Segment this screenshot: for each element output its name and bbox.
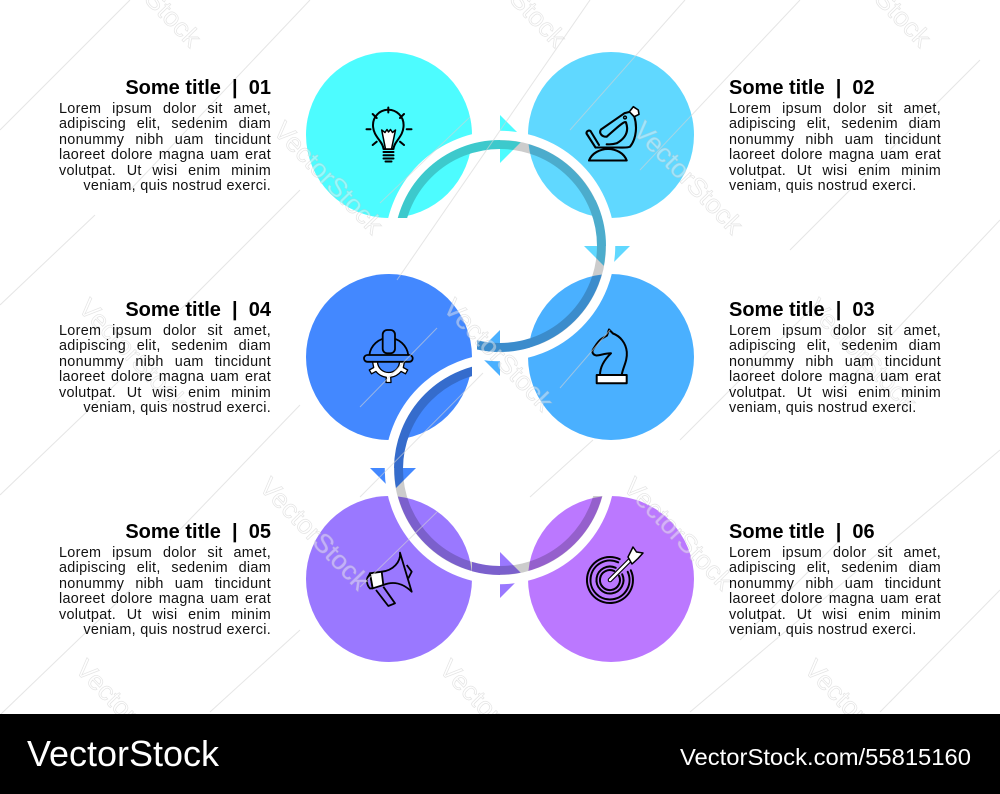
text block: 04: veniam, quis nostrud exerci. [83, 400, 271, 416]
text block: 05: veniam, quis nostrud exerci. [83, 622, 271, 638]
footer logo text: VectorStock [27, 733, 220, 774]
arc segment: violet [472, 562, 500, 575]
text block: 05: Lorem ipsum dolor sit amet, [59, 544, 271, 560]
text block: 04: nonummy nibh uam tincidunt [59, 354, 271, 370]
watermark pattern: VectorStock [434, 653, 556, 778]
arrow: 01 to 02 [500, 115, 524, 163]
arrow: 04 to 05 [370, 468, 416, 491]
text block: 01 [59, 77, 271, 194]
text block: 03: veniam, quis nostrud exerci. [729, 400, 917, 416]
arrow: 03 to 04 [477, 330, 500, 376]
arc shadow: upper [398, 144, 602, 348]
panel: circle 01 [306, 52, 472, 218]
arc segment: blue [477, 338, 530, 352]
text block: 06: nonummy nibh uam tincidunt [729, 576, 941, 592]
icon: helmet with gear [364, 330, 413, 382]
text block: 02: Lorem ipsum dolor sit amet, [729, 100, 941, 116]
text block: 02: veniam, quis nostrud exerci. [729, 178, 917, 194]
arc segment: royal blue [394, 366, 472, 468]
arc shadow: lower [398, 368, 602, 570]
text block: 02: volutpat. Ut wisi enim minim [729, 162, 941, 178]
text block: 05: Some title | 05 [125, 521, 271, 543]
text block: 04: volutpat. Ut wisi enim minim [59, 384, 271, 400]
watermark pattern: VectorStock [70, 653, 192, 778]
text block: 03 [729, 299, 941, 416]
text block: 04: adipiscing elit, sedenim diam [59, 338, 271, 354]
panel: circle 04 [306, 274, 472, 440]
watermark pattern: VectorStock [438, 292, 560, 417]
text block: 06: volutpat. Ut wisi enim minim [729, 606, 941, 622]
text block: 04 [59, 299, 271, 416]
icon: chess knight [592, 330, 627, 383]
text block: 03: volutpat. Ut wisi enim minim [729, 384, 941, 400]
text block: 04: Some title | 04 [125, 299, 271, 321]
arrow: 02 to 03 [584, 246, 630, 269]
panel: circle 02 [528, 52, 694, 218]
text block: 04: laoreet dolore magna uam erat [59, 369, 271, 385]
text block: 05: volutpat. Ut wisi enim minim [59, 606, 271, 622]
panel: circle 05 [306, 496, 472, 662]
text block: 01: volutpat. Ut wisi enim minim [59, 162, 271, 178]
arc segment: cyan [398, 140, 500, 218]
text block: 01: laoreet dolore magna uam erat [59, 147, 271, 163]
panel: circle 06 [528, 496, 694, 662]
text block: 01: Lorem ipsum dolor sit amet, [59, 100, 271, 116]
footer url: VectorStock.com/55815160 [680, 744, 971, 770]
text block: 05: adipiscing elit, sedenim diam [59, 560, 271, 576]
watermark pattern: VectorStock [73, 292, 195, 417]
footer bar [0, 714, 1000, 794]
text block: 03: laoreet dolore magna uam erat [729, 369, 941, 385]
text block: 06: adipiscing elit, sedenim diam [729, 560, 941, 576]
text block: 03: nonummy nibh uam tincidunt [729, 354, 941, 370]
text block: 03: Some title | 03 [729, 299, 875, 321]
watermark pattern: VectorStock [628, 115, 750, 240]
watermark pattern: VectorStock [618, 471, 740, 596]
icon: target with dart [587, 547, 643, 603]
ring: upper connector [390, 136, 610, 356]
text block: 02: adipiscing elit, sedenim diam [729, 116, 941, 132]
text block: 03: Lorem ipsum dolor sit amet, [729, 322, 941, 338]
watermark pattern: VectorStock [799, 653, 921, 778]
ring: lower connector [390, 358, 610, 580]
text block: 02: Some title | 02 [729, 77, 875, 99]
text block: 02 [729, 77, 941, 194]
icon: megaphone [367, 553, 412, 606]
watermark pattern: VectorStock [254, 471, 376, 596]
watermark pattern: VectorStock [268, 115, 390, 240]
text block: 02: nonummy nibh uam tincidunt [729, 132, 941, 148]
text block: 01: adipiscing elit, sedenim diam [59, 116, 271, 132]
arc segment: light blue [592, 200, 606, 246]
arrow: 05 to 06 [500, 552, 523, 598]
text block: 01: veniam, quis nostrud exerci. [83, 178, 271, 194]
text block: 01: nonummy nibh uam tincidunt [59, 132, 271, 148]
text block: 01: Some title | 01 [125, 77, 271, 99]
text block: 06: Some title | 06 [729, 521, 875, 543]
text block: 03: adipiscing elit, sedenim diam [729, 338, 941, 354]
watermark pattern: VectorStock [802, 292, 924, 417]
text block: 06: Lorem ipsum dolor sit amet, [729, 544, 941, 560]
text block: 06 [729, 521, 941, 638]
text block: 05: laoreet dolore magna uam erat [59, 591, 271, 607]
icon: microscope [586, 107, 639, 160]
text block: 04: Lorem ipsum dolor sit amet, [59, 322, 271, 338]
text block: 06: veniam, quis nostrud exerci. [729, 622, 917, 638]
icon: light bulb [366, 108, 412, 162]
text block: 05 [59, 521, 271, 638]
text block: 05: nonummy nibh uam tincidunt [59, 576, 271, 592]
text block: 06: laoreet dolore magna uam erat [729, 591, 941, 607]
panel: circle 03 [528, 274, 694, 440]
text block: 02: laoreet dolore magna uam erat [729, 147, 941, 163]
